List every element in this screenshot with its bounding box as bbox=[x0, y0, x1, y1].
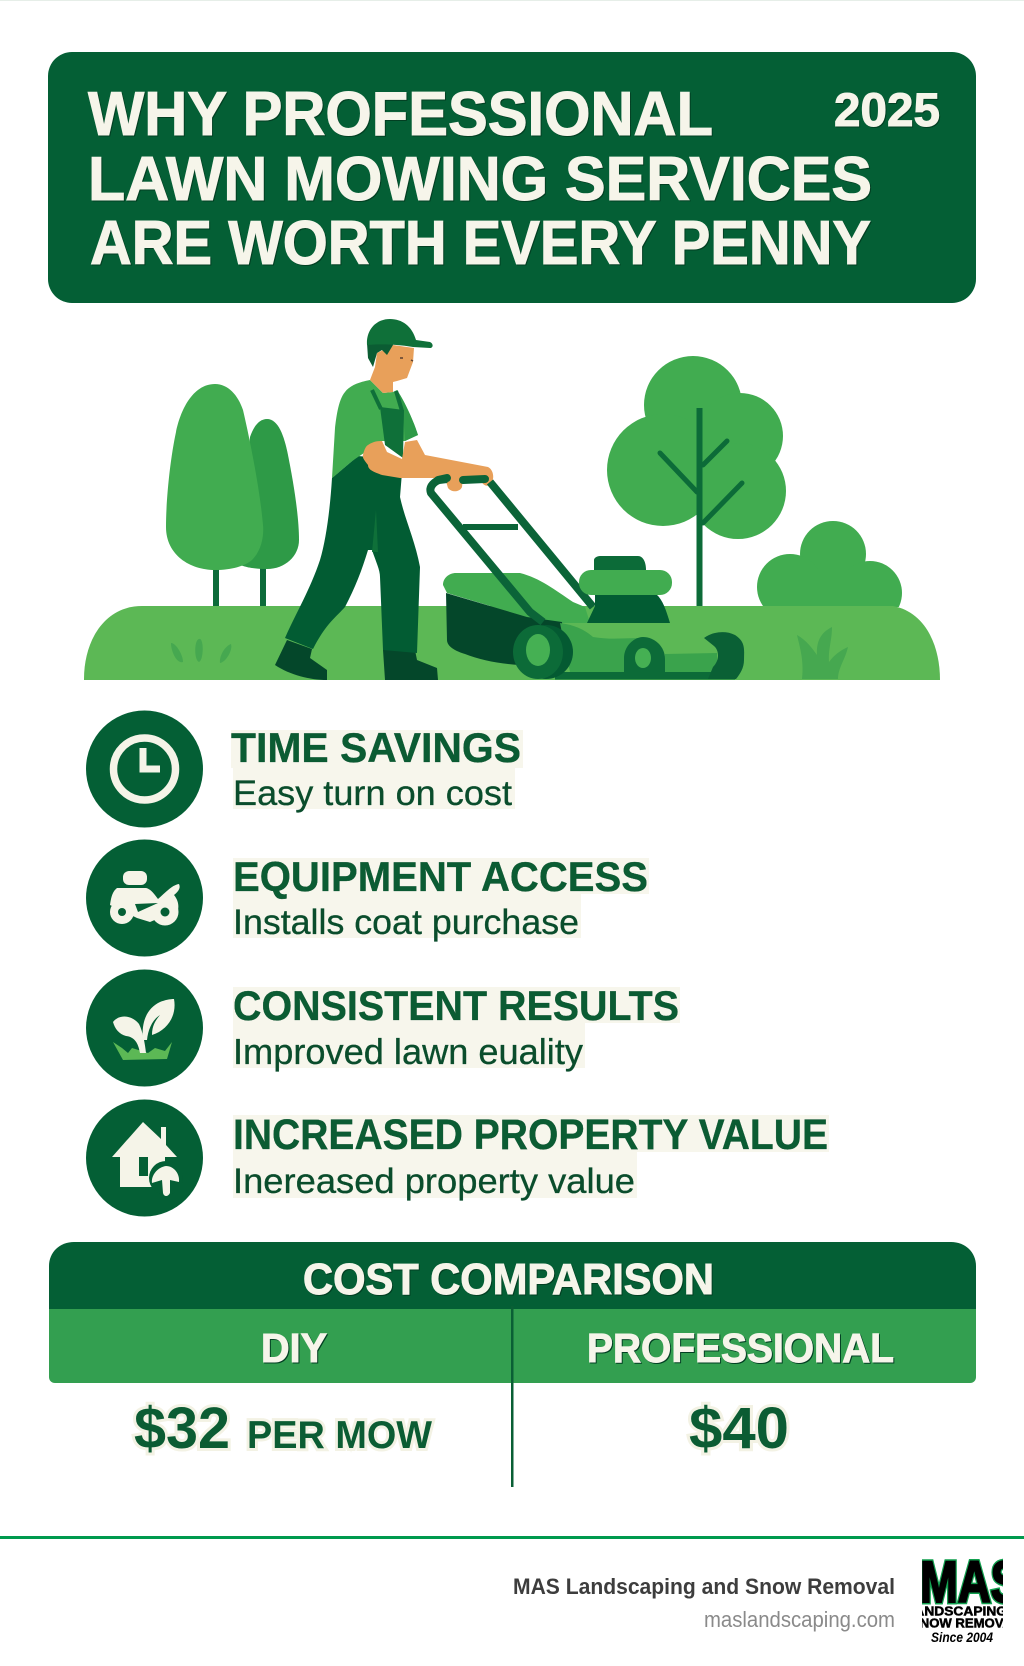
trousers bbox=[285, 456, 420, 653]
text block: TIME SAVINGS bbox=[231, 724, 521, 771]
table title: COST COMPARISON bbox=[303, 1255, 714, 1304]
title text: ARE WORTH EVERY PENNY bbox=[90, 209, 871, 278]
icon: sprout bbox=[86, 970, 203, 1086]
lawn mower bbox=[430, 478, 744, 680]
website: maslandscaping.com bbox=[704, 1607, 895, 1632]
round tree bbox=[607, 356, 786, 606]
bush bbox=[757, 521, 902, 607]
right sleeve bbox=[397, 390, 418, 441]
engine bbox=[594, 556, 646, 570]
DIY cost bbox=[134, 1396, 432, 1461]
text block: Easy turn on cost bbox=[233, 774, 512, 813]
handle bbox=[430, 479, 593, 622]
boots bbox=[275, 640, 327, 680]
text block: Improved lawn euality bbox=[233, 1031, 583, 1072]
grass tufts bbox=[171, 627, 848, 679]
icon: house with arrow bbox=[86, 1100, 203, 1216]
ground bbox=[84, 606, 940, 680]
worker bbox=[275, 319, 493, 680]
text block: Inereased property value bbox=[233, 1162, 635, 1201]
icon: clock bbox=[86, 710, 203, 828]
column label: professional: PROFESSIONAL bbox=[587, 1325, 894, 1371]
column divider bbox=[511, 1306, 514, 1487]
title text: LAWN MOWING SERVICES bbox=[88, 145, 872, 214]
logo: SNOW REMOVAL bbox=[911, 1616, 1020, 1630]
year label: 2025 bbox=[834, 83, 940, 136]
overall bib bbox=[372, 390, 404, 458]
title banner bbox=[48, 52, 976, 303]
mower deck top bbox=[443, 573, 590, 623]
column header row bbox=[49, 1309, 976, 1383]
text block: EQUIPMENT ACCESS bbox=[233, 853, 648, 900]
rear fender bbox=[704, 632, 744, 679]
text block: CONSISTENT RESULTS bbox=[233, 982, 679, 1029]
benefit: increased property value bbox=[86, 1100, 829, 1216]
benefit: time savings bbox=[86, 710, 523, 828]
rear wheel bbox=[513, 625, 573, 679]
professional cost: $40 bbox=[689, 1396, 789, 1461]
arm bbox=[363, 440, 493, 491]
DIY cost: PER MOW bbox=[247, 1414, 432, 1457]
tall trees bbox=[166, 384, 299, 607]
text block bbox=[233, 853, 649, 942]
illustration: lawn mowing scene bbox=[84, 319, 940, 680]
cap bbox=[367, 319, 433, 348]
neck and face bbox=[370, 345, 414, 393]
DIY cost: $32 bbox=[134, 1396, 230, 1461]
benefit: equipment access bbox=[86, 840, 649, 956]
table header bbox=[49, 1242, 976, 1309]
text block: Installs coat purchase bbox=[233, 903, 579, 942]
text block: INCREASED PROPERTY VALUE bbox=[233, 1111, 828, 1159]
icon: mower bbox=[86, 840, 203, 956]
logo bbox=[922, 1558, 1003, 1642]
company name: MAS Landscaping and Snow Removal bbox=[513, 1574, 895, 1599]
mower body bbox=[560, 623, 665, 672]
text block bbox=[233, 982, 680, 1072]
cost comparison table bbox=[49, 1242, 976, 1487]
title text: WHY PROFESSIONAL bbox=[88, 80, 713, 149]
benefit: consistent results bbox=[86, 970, 680, 1086]
text block bbox=[231, 724, 523, 813]
front wheel bbox=[624, 637, 665, 679]
shirt bbox=[332, 380, 418, 478]
logo: Since 2004 bbox=[931, 1629, 993, 1645]
logo: LANDSCAPING bbox=[906, 1604, 1007, 1618]
column label: DIY: DIY bbox=[261, 1325, 327, 1371]
text block bbox=[233, 1111, 829, 1201]
mower bag bbox=[446, 593, 565, 665]
title text bbox=[88, 80, 872, 278]
base rail bbox=[555, 672, 735, 680]
hair bbox=[367, 341, 393, 367]
footer bbox=[0, 1536, 1024, 1645]
